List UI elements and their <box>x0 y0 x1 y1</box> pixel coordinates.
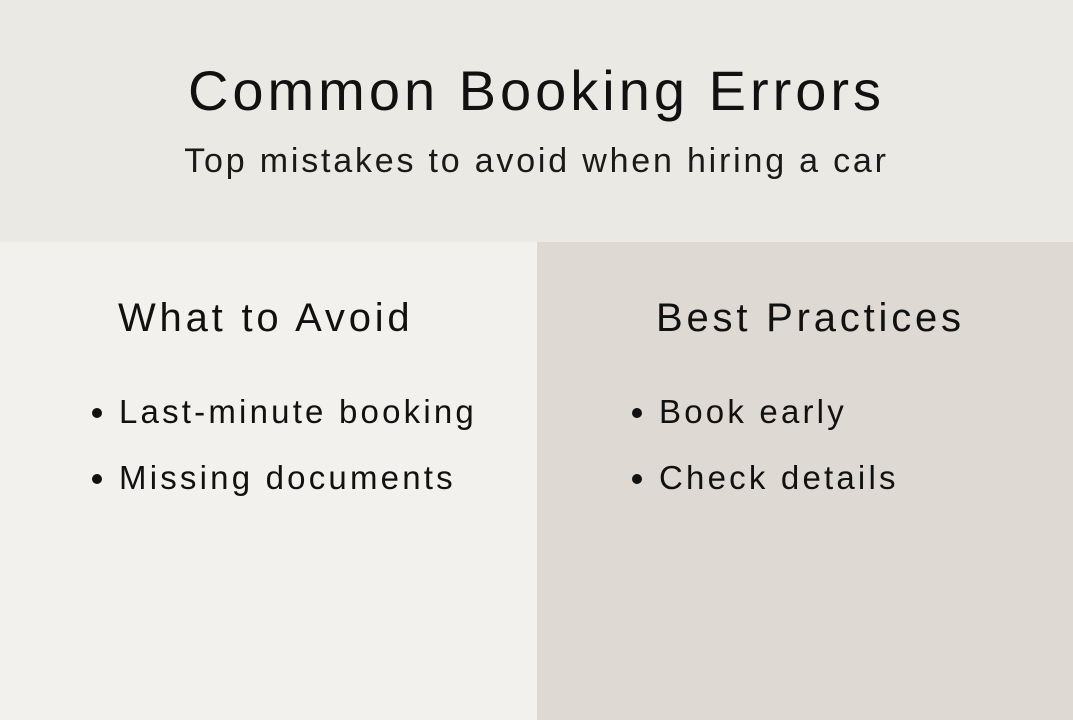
title: Common Booking Errors <box>188 59 885 122</box>
panel: what to avoid <box>0 242 537 720</box>
subtitle: Top mistakes to avoid when hiring a car <box>184 142 889 180</box>
bullet: missing documents: Missing documents <box>119 459 456 496</box>
bullet: check details: Check details <box>659 459 899 496</box>
bullet: last-minute booking: Last-minute booking <box>119 393 477 430</box>
bullet: book early: Book early <box>659 393 847 430</box>
heading: what to avoid: What to Avoid <box>118 296 413 340</box>
heading: best practices: Best Practices <box>656 296 965 340</box>
panel: best practices <box>537 242 1073 720</box>
header <box>0 0 1073 242</box>
